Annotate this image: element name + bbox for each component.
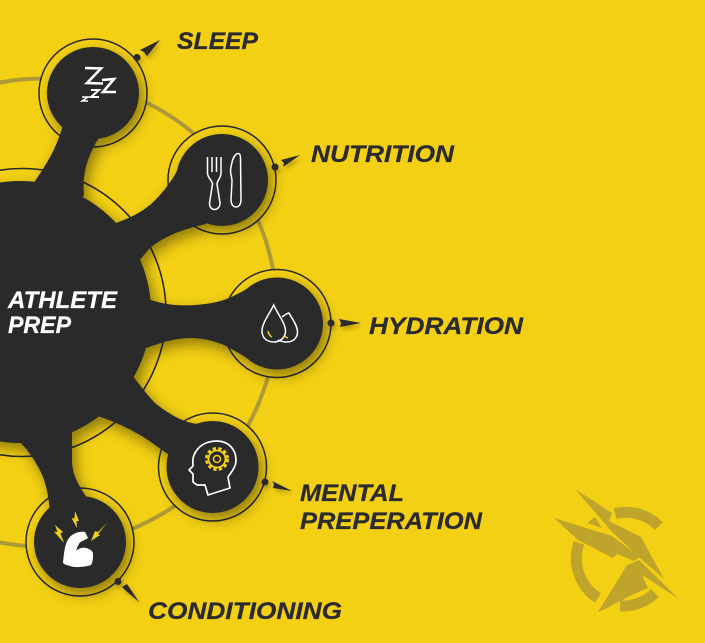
icon: flexed arm with bolts <box>54 511 107 567</box>
label: nutrition: NUTRITION <box>311 141 455 168</box>
pointer: mental preparation <box>262 478 292 491</box>
label: hydration: HYDRATION <box>369 313 524 340</box>
central hub with arms and node discs <box>0 47 323 588</box>
inner hub ring <box>0 168 166 456</box>
label: sleep: SLEEP <box>177 28 259 55</box>
hub title: ATHLETE PREP <box>7 287 118 339</box>
pointer: hydration <box>328 319 361 327</box>
icon: fork and knife <box>208 154 241 210</box>
hub title: ATHLETE PREP: PREP <box>8 312 72 339</box>
label: mental preparation <box>300 480 483 535</box>
pointer: sleep <box>134 40 160 61</box>
pointer: nutrition <box>272 155 300 170</box>
label: conditioning: CONDITIONING <box>148 598 342 625</box>
outer orbit ring <box>0 78 277 546</box>
label: mental preparation: PREPERATION <box>300 508 483 535</box>
icon: head with gear <box>189 441 236 495</box>
hub title: ATHLETE PREP: ATHLETE <box>7 287 118 314</box>
icon: sleep Zzz <box>82 68 116 101</box>
logo watermark <box>554 489 679 612</box>
pointer: conditioning <box>114 578 139 602</box>
label: mental preparation: MENTAL <box>300 480 404 507</box>
icon: water drops <box>262 305 298 342</box>
outline rings around nodes <box>26 39 331 596</box>
